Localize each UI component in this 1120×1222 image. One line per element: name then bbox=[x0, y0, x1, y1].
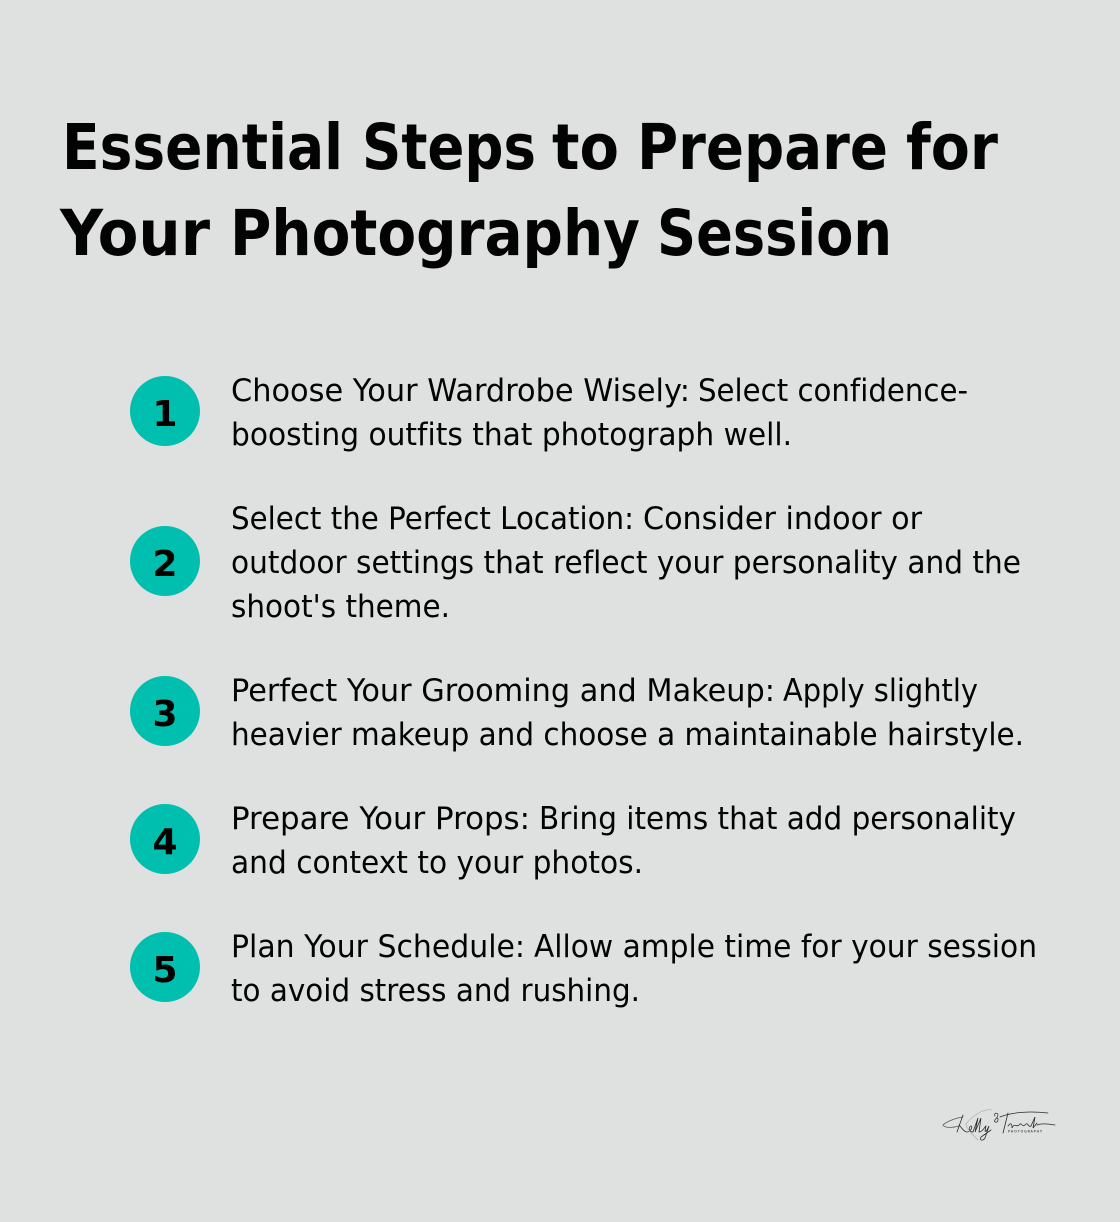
signature logo: PHOTOGRAPHY bbox=[1008, 1130, 1042, 1134]
signature logo bbox=[943, 1110, 1055, 1140]
step 2 text: outdoor settings that reflect your personality and the bbox=[231, 545, 1021, 581]
step 2 text: Consider indoor or bbox=[643, 501, 922, 537]
title: Your bbox=[59, 197, 210, 270]
step 4 number badge: 4 bbox=[152, 822, 178, 863]
step 1 number badge bbox=[130, 376, 200, 446]
title bbox=[59, 111, 998, 270]
title: for bbox=[906, 111, 998, 184]
step 4 number badge bbox=[130, 804, 200, 874]
title: Steps bbox=[362, 111, 536, 184]
step 5 number badge bbox=[130, 932, 200, 1002]
step 1 text: Select confidence- bbox=[698, 373, 968, 409]
step 3 text: Apply slightly bbox=[783, 673, 978, 709]
step 4 bbox=[130, 801, 1016, 881]
step 5 text bbox=[231, 929, 1037, 1009]
title: Prepare bbox=[637, 111, 888, 184]
step 2 text: Select the Perfect Location: bbox=[231, 501, 634, 537]
step 4 text: Prepare Your Props: bbox=[231, 801, 530, 837]
step 2 bbox=[130, 501, 1021, 625]
step 1 text: boosting outfits that photograph well. bbox=[231, 417, 792, 453]
step 2 text bbox=[231, 501, 1021, 625]
step 1 text: Choose Your Wardrobe Wisely: bbox=[231, 373, 690, 409]
step 5 bbox=[130, 929, 1037, 1009]
step 5 text: to avoid stress and rushing. bbox=[231, 973, 640, 1009]
step 3 number badge bbox=[130, 676, 200, 746]
title: to bbox=[552, 111, 619, 184]
step 2 number badge bbox=[130, 526, 200, 596]
step 1 text bbox=[231, 373, 968, 453]
step 4 text: and context to your photos. bbox=[231, 845, 643, 881]
step 3 number badge: 3 bbox=[152, 694, 178, 735]
title: Photography bbox=[230, 197, 640, 270]
step 2 number badge: 2 bbox=[152, 544, 178, 585]
step 3 text bbox=[231, 673, 1024, 753]
step 1 number badge: 1 bbox=[152, 394, 178, 435]
step 2 text: shoot's theme. bbox=[231, 589, 450, 625]
step 4 text bbox=[231, 801, 1016, 881]
step 3 text: heavier makeup and choose a maintainable hairstyle. bbox=[231, 717, 1024, 753]
step 1 bbox=[130, 373, 968, 453]
step 5 text: Allow ample time for your session bbox=[534, 929, 1037, 965]
step 3 bbox=[130, 673, 1024, 753]
step 5 text: Plan Your Schedule: bbox=[231, 929, 525, 965]
title: Session bbox=[657, 197, 892, 270]
step 4 text: Bring items that add personality bbox=[539, 801, 1016, 837]
step 5 number badge: 5 bbox=[152, 950, 178, 991]
step 3 text: Perfect Your Grooming and Makeup: bbox=[231, 673, 775, 709]
title: Essential bbox=[62, 111, 343, 184]
